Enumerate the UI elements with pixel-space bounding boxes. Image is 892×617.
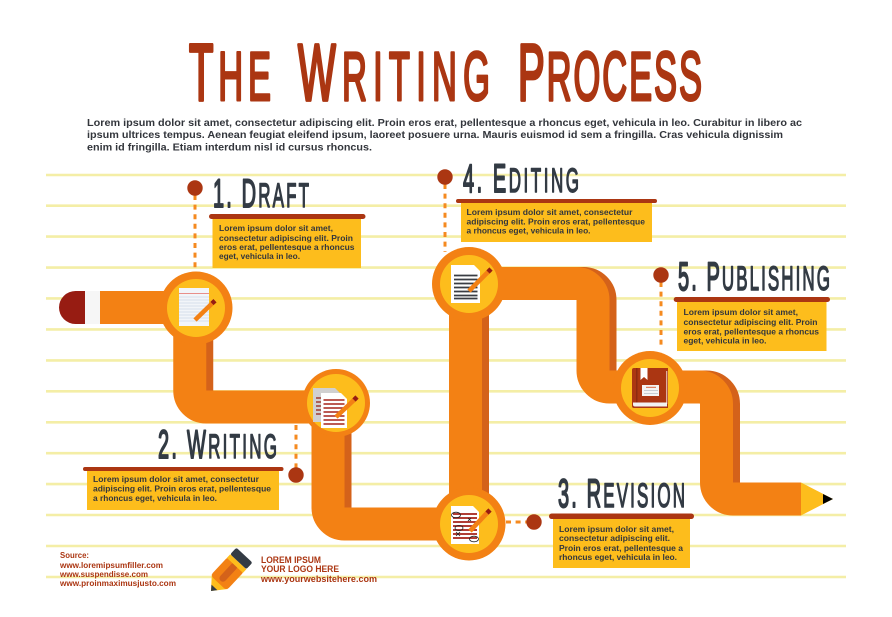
step 3 text panel: consectetur adipiscing elit.	[559, 533, 670, 543]
icon: lined paper and pencil	[179, 288, 215, 326]
icon: corrected page and pencil	[451, 506, 490, 544]
step 3 heading: 3. REVISION	[558, 470, 685, 516]
step 1 text panel	[209, 214, 366, 268]
step 4 text panel	[456, 199, 657, 242]
icon: book	[632, 368, 668, 408]
step 5 text panel: eros erat, pellentesque a rhoncus	[684, 326, 819, 336]
intro text: ipsum ultrices tempus. Aenean feugiat eleifend ipsum, laoreet posuere urna. Mauris euismod id sem a fringilla. Cras vehicula dignissim	[87, 130, 783, 141]
connector 1	[187, 180, 203, 272]
step 1 text panel: Lorem ipsum dolor sit amet,	[219, 223, 333, 233]
step 1 text panel: eget, vehicula in leo.	[219, 251, 300, 261]
pencil eraser	[59, 291, 85, 324]
step 1 text panel: eros erat, pellentesque a rhoncus	[219, 242, 355, 252]
step 3 text panel: Lorem ipsum dolor sit amet,	[559, 524, 674, 534]
logo text: LOREM IPSUM	[261, 555, 321, 565]
step 3 text panel: rhoncus eget, vehicula in leo.	[559, 552, 677, 562]
node 3: revision	[432, 488, 506, 560]
icon: logo pencil	[203, 548, 252, 599]
pencil path	[59, 284, 833, 524]
logo text: YOUR LOGO HERE	[261, 564, 339, 574]
title: PROCESS	[518, 29, 702, 118]
source list: www.suspendisse.com	[59, 569, 148, 579]
step 4 text panel: Lorem ipsum dolor sit amet, consectetur	[466, 207, 633, 217]
logo text	[260, 555, 377, 584]
step 4 text panel: adipiscing elit. Proin eros erat, pellentesque	[466, 216, 645, 226]
pencil ferrule	[85, 291, 100, 324]
pencil tip	[801, 482, 833, 516]
step 2 text panel: a rhoncus eget, vehicula in leo.	[93, 493, 217, 503]
step 4 text panel: a rhoncus eget, vehicula in leo.	[466, 226, 590, 236]
source list: www.loremipsumfiller.com	[59, 560, 163, 570]
step 1 text panel: consectetur adipiscing elit. Proin	[219, 233, 353, 243]
step 5 heading: 5. PUBLISHING	[678, 253, 830, 299]
intro text	[87, 118, 802, 154]
source list: Source:	[60, 550, 89, 560]
source list: www.proinmaximusjusto.com	[59, 578, 176, 588]
step 1 heading: 1. DRAFT	[213, 170, 309, 216]
step 5 text panel	[674, 297, 830, 351]
source list	[59, 550, 176, 588]
title: WRITING	[298, 29, 490, 118]
step 2 heading: 2. WRITING	[158, 421, 277, 467]
step 2 text panel: adipiscing elit. Proin eros erat, pellentesque	[93, 484, 271, 494]
icon: stacked pages and pencil	[313, 388, 357, 428]
node 2: writing	[302, 369, 370, 437]
step 5 text panel: Lorem ipsum dolor sit amet,	[684, 307, 798, 317]
pencil lead	[823, 494, 833, 504]
step 5 text panel: consectetur adipiscing elit. Proin	[684, 317, 818, 327]
node 4: editing	[432, 247, 506, 321]
title: THE	[189, 29, 271, 118]
node 1: draft	[160, 272, 232, 344]
icon: typed page and pencil	[451, 265, 491, 303]
title	[189, 29, 702, 118]
step 2 text panel	[83, 467, 284, 510]
connector 2	[288, 425, 304, 483]
intro text: enim id fringilla. Etiam interdum nisl id cursus rhoncus.	[87, 142, 372, 154]
step 3 text panel	[549, 514, 694, 568]
connector 4	[437, 169, 453, 252]
connector 5	[653, 267, 669, 349]
step 4 heading: 4. EDITING	[463, 155, 579, 201]
step 3 text panel: Proin eros erat, pellentesque a	[559, 543, 683, 553]
step 2 text panel: Lorem ipsum dolor sit amet, consectetur	[93, 474, 260, 484]
intro text: Lorem ipsum dolor sit amet, consectetur adipiscing elit. Proin eros erat, pellentesque a rhoncus eget, vehicula in leo. Curabitur in libero ac	[87, 118, 802, 129]
node 5: publishing	[613, 351, 687, 425]
connector 3	[506, 514, 542, 530]
logo text: www.yourwebsitehere.com	[260, 574, 377, 584]
step 5 text panel: eget, vehicula in leo.	[684, 336, 766, 346]
